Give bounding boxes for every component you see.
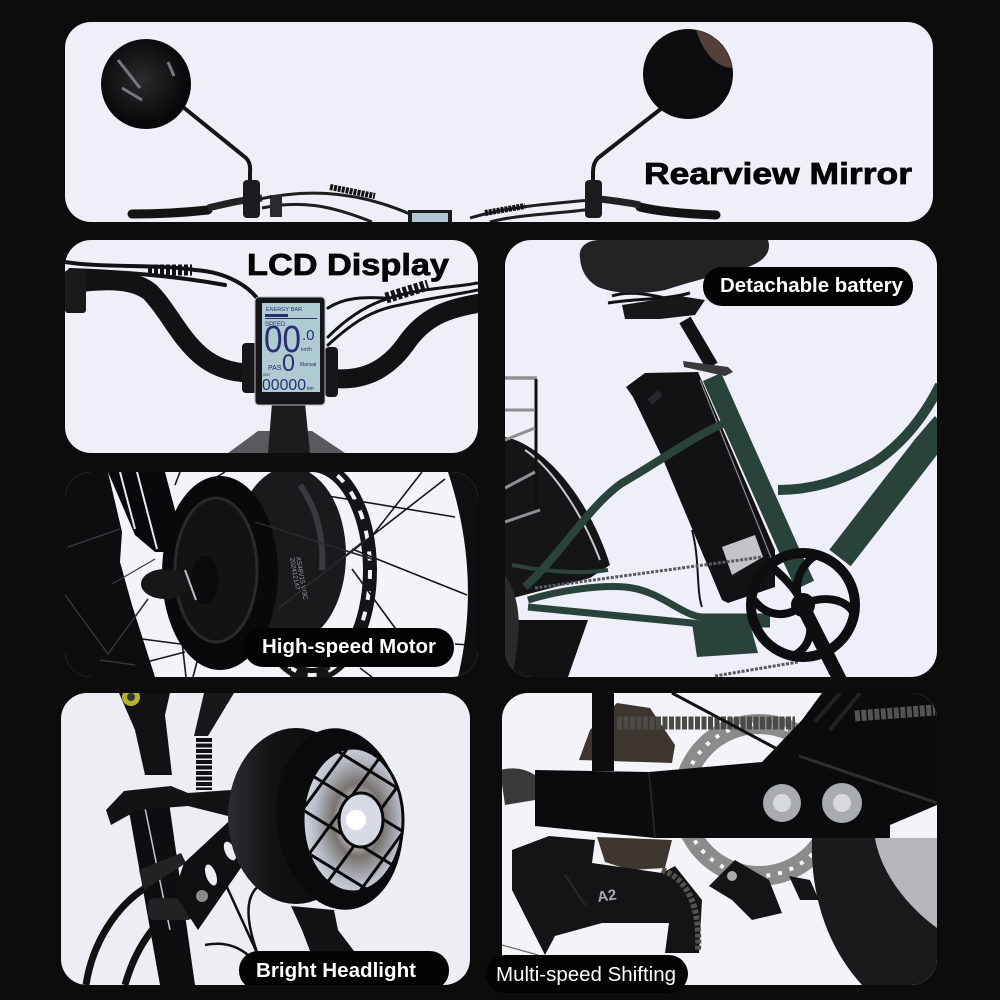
stem clamps xyxy=(242,343,338,397)
cables xyxy=(672,693,779,750)
icon: LCD screen: .0 xyxy=(302,327,315,344)
icon: LCD screen: km xyxy=(307,386,314,392)
cable and chain xyxy=(535,530,798,676)
icon: LCD screen: PAS xyxy=(268,365,282,372)
rear fender and tire xyxy=(505,437,610,677)
headlight top and stem xyxy=(228,403,345,453)
top chain on right xyxy=(855,710,935,716)
cassette lower xyxy=(597,837,672,870)
hub spokes on top xyxy=(255,522,372,609)
fork and stem xyxy=(119,688,195,985)
label: Detachable battery: Detachable battery xyxy=(720,275,904,297)
panel: rearview mirror xyxy=(65,22,933,222)
icon: LCD screen: 00 xyxy=(264,319,301,361)
icon: battery xyxy=(626,372,775,603)
icon: LCD screen: SPEED xyxy=(265,322,286,328)
wires xyxy=(205,885,260,955)
icon: LCD screen: ENERGY BAR xyxy=(266,307,302,313)
rear basket xyxy=(505,378,540,522)
icon: brake caliper xyxy=(709,860,819,920)
panel: LCD display xyxy=(65,240,480,453)
panel: detachable battery xyxy=(505,240,945,680)
icon: LCD screen: 00000 xyxy=(262,377,306,394)
icon: derailleur and chain: A2 xyxy=(596,886,618,906)
heading: Rearview Mirror: Rearview Mirror xyxy=(644,156,912,191)
icon: left mirror xyxy=(101,39,250,192)
frame gusset xyxy=(692,626,758,657)
bike frame xyxy=(512,377,945,624)
icon: LCD screen: 000 xyxy=(263,372,270,377)
fender arc xyxy=(82,886,152,985)
handlebar xyxy=(65,262,480,379)
left tire xyxy=(65,472,155,677)
control pad xyxy=(65,270,86,313)
cable with spring xyxy=(194,693,234,790)
label: High-speed Motor: High-speed Motor xyxy=(262,636,436,658)
post xyxy=(592,693,614,771)
label: Bright Headlight xyxy=(239,951,449,990)
panel: multi-speed shifting xyxy=(500,693,937,985)
heading: LCD Display: LCD Display xyxy=(247,247,450,282)
seat post and clamp xyxy=(683,320,733,376)
icon: motor hub: 202412147 xyxy=(288,557,301,591)
headlight mount post xyxy=(291,906,354,951)
cassette upper xyxy=(579,703,675,763)
chain upper xyxy=(617,716,795,730)
brake rotor xyxy=(683,724,835,876)
icon: right mirror xyxy=(593,29,733,192)
handlebar xyxy=(132,180,716,222)
rear tire xyxy=(812,838,937,985)
handlebar clamp xyxy=(106,786,231,825)
label: Multi-speed Shifting xyxy=(486,955,688,993)
bracket xyxy=(174,810,263,930)
icon: chainring and crank xyxy=(751,553,855,680)
rotor disc xyxy=(279,472,377,677)
icon: motor hub xyxy=(141,467,346,670)
icon: headlight xyxy=(228,715,456,922)
label: High-speed Motor xyxy=(244,628,454,667)
fork clamp band xyxy=(139,853,186,890)
panel: high-speed motor xyxy=(65,465,478,677)
wheel spokes xyxy=(108,472,468,677)
icon: derailleur and chain xyxy=(512,836,702,955)
fork xyxy=(108,472,176,552)
icon: LCD screen: 0 xyxy=(282,350,295,377)
icon: LCD screen: km/h xyxy=(301,347,312,353)
cable lower left xyxy=(502,945,538,955)
frame plate xyxy=(500,693,937,838)
icon: LCD screen: Manual xyxy=(300,362,316,368)
right rim xyxy=(448,472,478,677)
label: Bright Headlight: Bright Headlight xyxy=(256,960,416,982)
panel: bright headlight xyxy=(61,688,470,990)
label: Multi-speed Shifting: Multi-speed Shifting xyxy=(496,964,676,986)
lens grille xyxy=(262,715,456,922)
spokes on tire xyxy=(65,529,155,665)
icon: seat xyxy=(580,240,769,319)
icon: LCD screen xyxy=(255,297,325,405)
icon: bolts xyxy=(763,783,862,823)
icon: motor hub: XS48V15 W3C xyxy=(294,556,309,601)
label: Detachable battery xyxy=(703,267,913,306)
